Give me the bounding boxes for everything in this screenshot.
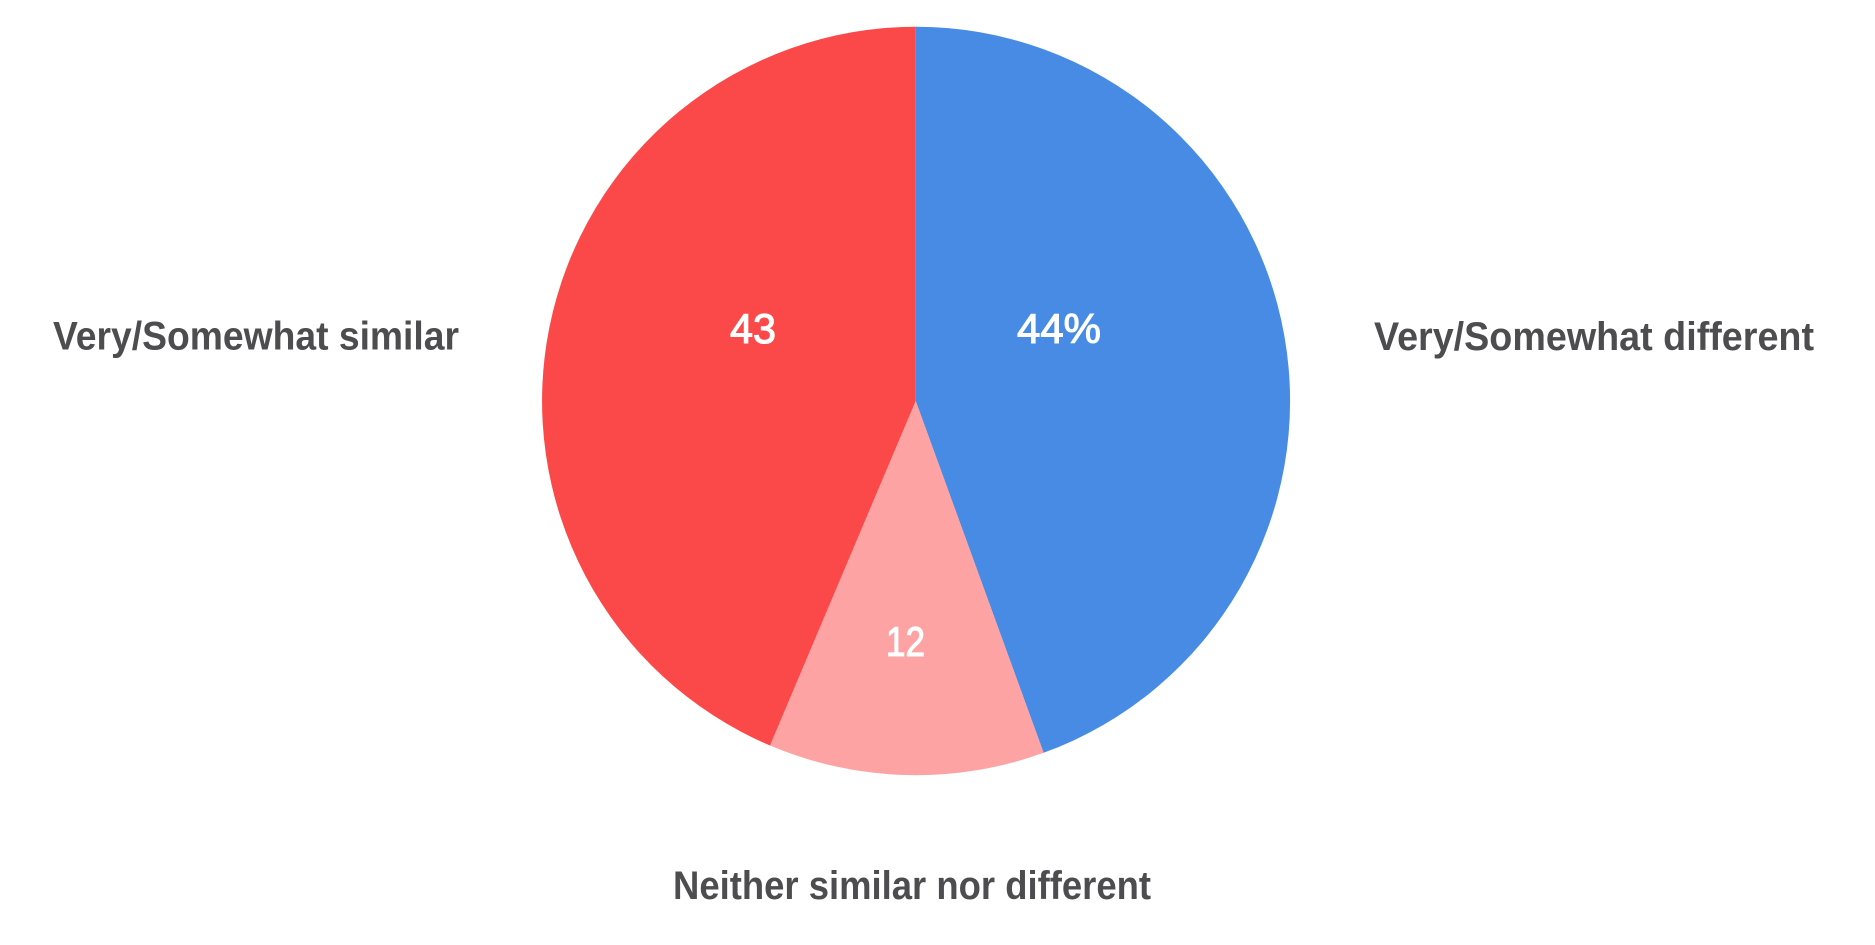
label: very/somewhat different: Very/Somewhat different (1374, 315, 1814, 359)
slice: very/somewhat similar 43 (542, 27, 916, 745)
value: 43: 43 (730, 305, 776, 352)
label: very/somewhat similar: Very/Somewhat similar (53, 314, 459, 358)
label: neither similar nor different: Neither similar nor different (673, 864, 1151, 908)
slice: very/somewhat different 44% (916, 27, 1290, 753)
slice: neither 12 (770, 401, 1044, 775)
value: 44%: 44% (1017, 305, 1101, 352)
pie chart (542, 27, 1290, 775)
value: 12: 12 (886, 618, 925, 665)
